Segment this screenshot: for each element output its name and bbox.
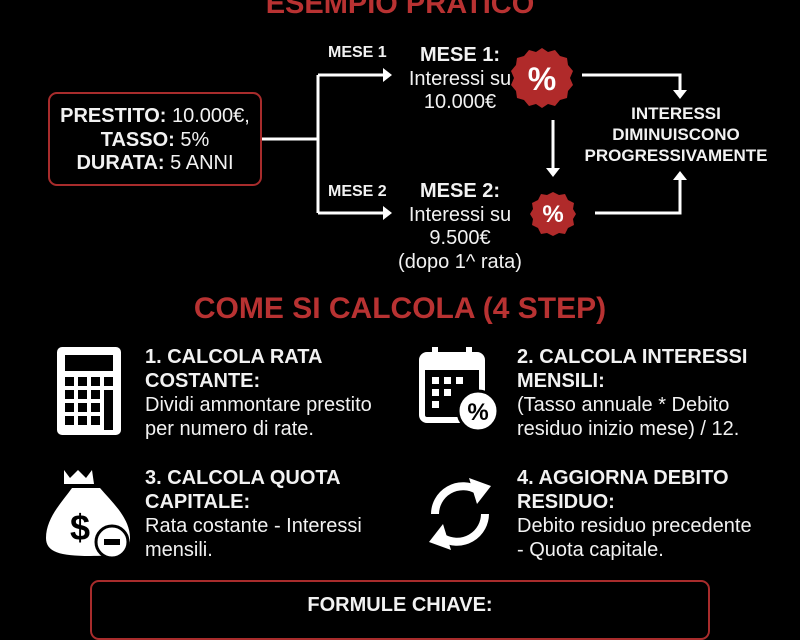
text: mese 2 — [398, 180, 522, 272]
box: loan data: PRESTITO: 10.000€, — [60, 105, 250, 127]
label: mese 2: MESE 2 — [328, 183, 387, 200]
box: loan data — [48, 92, 262, 186]
text: step 4 — [517, 467, 752, 561]
text: mese 1 — [409, 44, 511, 113]
text: step 3: mensili. — [145, 539, 213, 561]
text: result: PROGRESSIVAMENTE — [585, 146, 767, 165]
text: step 2 — [517, 346, 747, 440]
title: come si calcola: COME SI CALCOLA (4 STEP) — [194, 292, 606, 325]
icon: refresh — [429, 478, 491, 550]
text: step 4: Debito residuo precedente — [517, 515, 752, 537]
text: step 1: per numero di rate. — [145, 418, 314, 440]
text: step 3: 3. CALCOLA QUOTA — [145, 467, 341, 489]
text: result: INTERESSI — [631, 104, 721, 123]
text: mese 2: 9.500€ — [429, 227, 491, 249]
text: step 2: (Tasso annuale * Debito — [517, 394, 729, 416]
step 4 — [429, 467, 752, 561]
icon: calendar percent: % — [467, 399, 489, 426]
text: mese 1: Interessi su — [409, 68, 511, 90]
text: step 1: COSTANTE: — [145, 370, 260, 392]
text: step 3: CAPITALE: — [145, 491, 250, 513]
text: result — [585, 104, 767, 165]
icon: money bag minus: $ — [70, 507, 90, 548]
icon: percent badge 2 — [530, 192, 576, 236]
text: mese 1: 10.000€ — [424, 91, 496, 113]
step 3 — [46, 467, 362, 561]
text: step 4: - Quota capitale. — [517, 539, 664, 561]
text: mese 2: (dopo 1^ rata) — [398, 250, 522, 272]
icon: money bag minus — [46, 470, 130, 556]
icon: percent badge 1 — [511, 48, 573, 108]
icon: calculator — [57, 347, 121, 435]
text: step 2: 2. CALCOLA INTERESSI — [517, 346, 747, 368]
box: formule chiave — [90, 580, 710, 640]
icon: calendar percent — [419, 347, 496, 430]
step 1 — [57, 346, 372, 440]
text: step 1: Dividi ammontare prestito — [145, 394, 372, 416]
text: step 4: 4. AGGIORNA DEBITO — [517, 467, 729, 489]
label: mese 1: MESE 1 — [328, 44, 387, 61]
text: mese 2: MESE 2: — [420, 180, 500, 202]
text: mese 1: MESE 1: — [420, 44, 500, 66]
diagram arrows — [262, 48, 687, 236]
icon: percent badge 1: % — [528, 61, 556, 97]
text: result: DIMINUISCONO — [612, 125, 740, 144]
box: loan data: DURATA: 5 ANNI — [76, 152, 234, 174]
text: step 1: 1. CALCOLA RATA — [145, 346, 322, 368]
box: formule chiave: FORMULE CHIAVE: — [307, 594, 493, 616]
box: loan data: TASSO: 5% — [101, 128, 209, 150]
text: mese 2: Interessi su — [409, 204, 511, 226]
text: step 3 — [145, 467, 362, 561]
text: step 2: MENSILI: — [517, 370, 605, 392]
text: step 4: RESIDUO: — [517, 491, 615, 513]
text: step 3: Rata costante - Interessi — [145, 515, 362, 537]
text: step 1 — [145, 346, 372, 440]
text: step 2: residuo inizio mese) / 12. — [517, 418, 739, 440]
step 2 — [419, 346, 747, 440]
icon: percent badge 2: % — [542, 201, 564, 228]
